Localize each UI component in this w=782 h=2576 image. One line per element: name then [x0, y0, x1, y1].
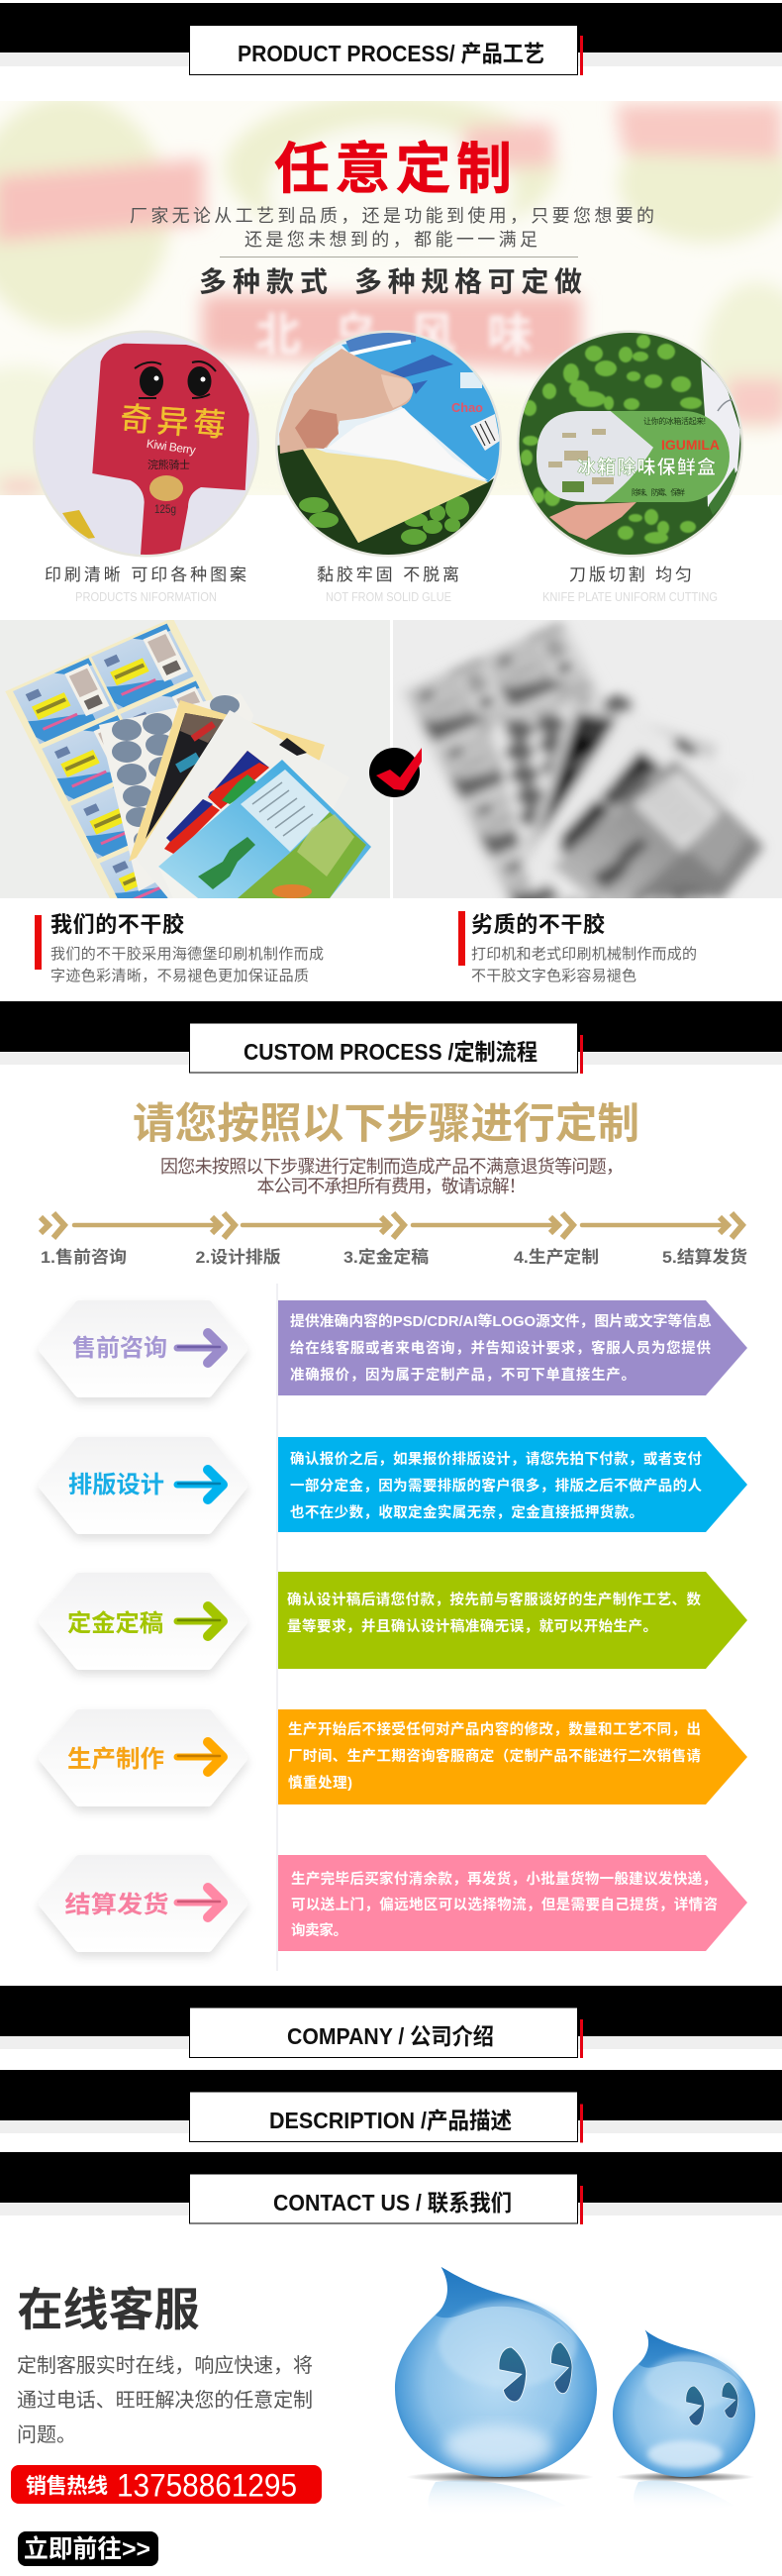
caption: poor stickers: 不干胶文字色彩容易褪色	[471, 968, 636, 984]
step 1: pre-sale consultation: 售前咨询	[72, 1335, 167, 1362]
icon: large wangwang droplet	[395, 2267, 597, 2517]
comparison photo: poor quality stickers (blurred)	[393, 620, 782, 898]
title: 任意定制: 任意定制	[274, 138, 512, 200]
icon: check badge	[369, 748, 422, 797]
feature captions: KNIFE PLATE UNIFORM CUTTING	[542, 589, 718, 604]
customer service text: 问题。	[17, 2423, 76, 2446]
caption: our stickers: 我们的不干胶	[50, 912, 184, 937]
step 4: production: 生产制作	[67, 1746, 164, 1773]
section header: company: COMPANY / 公司介绍	[287, 2023, 494, 2049]
notice text: 因您未按照以下步骤进行定制而造成产品不满意退货等问题，	[160, 1157, 624, 1177]
step 1: pre-sale consultation: 给在线客服或者来电咨询，并告知设计要求，客服人员为您提供	[290, 1339, 711, 1357]
heading: follow these steps: 请您按照以下步骤进行定制	[133, 1101, 639, 1148]
step 3: deposit and final draft: 确认设计稿后请您付款，按先前与客服谈好的生产制作工艺、数	[287, 1591, 701, 1608]
step 2: layout design	[44, 1437, 747, 1532]
intro text: 还是您未想到的，都能一一满足	[244, 230, 538, 250]
photo circle: printed label: 浣熊骑士	[147, 458, 190, 471]
process timeline: 1.售前咨询	[41, 1248, 127, 1267]
step 5: settlement and shipping	[44, 1855, 747, 1951]
section header: contact us: CONTACT US / 联系我们	[273, 2190, 512, 2215]
photo circle: peel-off adhesive	[275, 327, 505, 565]
section header: description: DESCRIPTION /产品描述	[269, 2108, 512, 2133]
step 4: production: 生产开始后不接受任何对产品内容的修改，数量和工艺不同，出	[288, 1720, 701, 1738]
feature captions: 印刷清晰 可印各种图案	[45, 566, 246, 584]
subtitle: 多种款式	[199, 266, 328, 297]
photo circle: knife-cut label: 除味、防霉、保鲜	[632, 487, 685, 497]
feature captions: PRODUCTS NIFORMATION	[75, 589, 217, 604]
section header: custom process: CUSTOM PROCESS /定制流程	[244, 1039, 538, 1065]
step 2: layout design: 一部分定金，因为需要排版的客户很多，排版之后不做产品的人	[290, 1477, 703, 1494]
photo circle: knife-cut label: 冰箱除味保鲜盒	[577, 456, 716, 478]
process timeline: 3.定金定稿	[343, 1247, 429, 1267]
feature captions: 刀版切割 均匀	[569, 566, 692, 584]
blurred sticker background: 北乌风味	[255, 309, 533, 361]
step 3: deposit and final draft	[44, 1572, 747, 1669]
photo circle: knife-cut label: IGUMILA	[661, 438, 720, 453]
caption: our stickers: 字迹色彩清晰，不易褪色更加保证品质	[50, 968, 309, 984]
step 1: pre-sale consultation: 提供准确内容的PSD/CDR/AI等LOGO源文件，图片或文字等信息	[290, 1312, 712, 1330]
step 3: deposit and final draft: 定金定稿	[67, 1609, 163, 1637]
step 2: layout design: 也不在少数，收取定金实属无奈，定金直接抵押货款。	[290, 1503, 643, 1521]
step 5: settlement and shipping: 结算发货	[65, 1892, 168, 1918]
step 5: settlement and shipping: 可以送上门，偏远地区可以选择物流，但是需要自己提货，详情咨	[291, 1896, 718, 1913]
step 1: pre-sale consultation	[44, 1300, 747, 1395]
sales hotline pill: 销售热线	[26, 2475, 108, 2498]
feature captions	[45, 566, 718, 604]
step 1: pre-sale consultation: 准确报价，因为属于定制产品，不可下单直接生产。	[290, 1366, 635, 1384]
process timeline: 4.生产定制	[514, 1247, 599, 1267]
step 2: layout design: 确认报价之后，如果报价排版设计，请您先拍下付款，或者支付	[290, 1450, 703, 1468]
photo circle: peel-off adhesive: Chao	[451, 400, 483, 415]
section header: custom process	[0, 1001, 782, 1074]
section header: company	[0, 1986, 782, 2058]
step 5: settlement and shipping: 生产完毕后买家付清余款，再发货，小批量货物一般建议发快递，	[291, 1870, 717, 1888]
feature captions: NOT FROM SOLID GLUE	[326, 589, 451, 604]
heading: online customer service: 在线客服	[18, 2284, 200, 2335]
caption: poor stickers	[458, 911, 697, 984]
caption: our stickers: 我们的不干胶采用海德堡印刷机制作而成	[50, 945, 324, 963]
customer service text: 定制客服实时在线，响应快速，将	[17, 2354, 313, 2377]
step 4: production: 厂时间、生产工期咨询客服商定（定制产品不能进行二次销售请	[288, 1747, 701, 1765]
comparison photo: our stickers	[0, 620, 390, 898]
step 3: deposit and final draft: 量等要求，并且确认设计稿准确无误，就可以开始生产。	[287, 1617, 657, 1635]
photo circle: printed label: 125g	[154, 502, 176, 516]
step 4: production: 慎重处理)	[288, 1774, 352, 1792]
notice text	[160, 1157, 624, 1196]
sales hotline pill	[11, 2465, 322, 2504]
process timeline	[41, 1213, 747, 1267]
caption: poor stickers: 打印机和老式印刷机械制作而成的	[471, 946, 697, 963]
blurred sticker background	[0, 94, 782, 505]
icon: small wangwang droplet	[613, 2330, 755, 2513]
subtitle	[199, 266, 582, 297]
step 5: settlement and shipping: 询卖家。	[291, 1921, 347, 1939]
process timeline: 2.设计排版	[196, 1248, 281, 1267]
process timeline: 5.结算发货	[662, 1247, 747, 1267]
caption: our stickers	[35, 912, 324, 984]
photo circle: printed label	[30, 327, 267, 565]
photo circle: knife-cut label	[515, 327, 747, 565]
intro text: 厂家无论从工艺到品质，还是功能到使用，只要您想要的	[130, 206, 654, 226]
photo circle: printed label: Kiwi Berry	[146, 437, 197, 458]
customer service text	[17, 2354, 313, 2446]
divider	[220, 256, 578, 258]
intro text	[130, 206, 654, 250]
step 4: production	[44, 1709, 747, 1804]
go now button: 立即前往>>	[24, 2535, 150, 2563]
notice text: 本公司不承担所有费用，敬请谅解！	[257, 1177, 527, 1196]
caption: poor stickers: 劣质的不干胶	[471, 912, 605, 937]
photo circle: knife-cut label: 让你的冰箱活起来!	[643, 416, 706, 426]
section header: product process: PRODUCT PROCESS/ 产品工艺	[238, 41, 544, 66]
step 2: layout design: 排版设计	[68, 1472, 164, 1498]
section header: product process	[0, 3, 782, 75]
section header: description	[0, 2070, 782, 2143]
customer service text: 通过电话、旺旺解决您的任意定制	[17, 2389, 313, 2412]
sales hotline pill: 13758861295	[117, 2468, 297, 2504]
section header: contact us	[0, 2152, 782, 2224]
subtitle: 多种规格可定做	[354, 266, 582, 297]
photo circle: printed label: 奇异莓	[119, 400, 227, 444]
feature captions: 黏胶牢固 不脱离	[317, 566, 459, 584]
